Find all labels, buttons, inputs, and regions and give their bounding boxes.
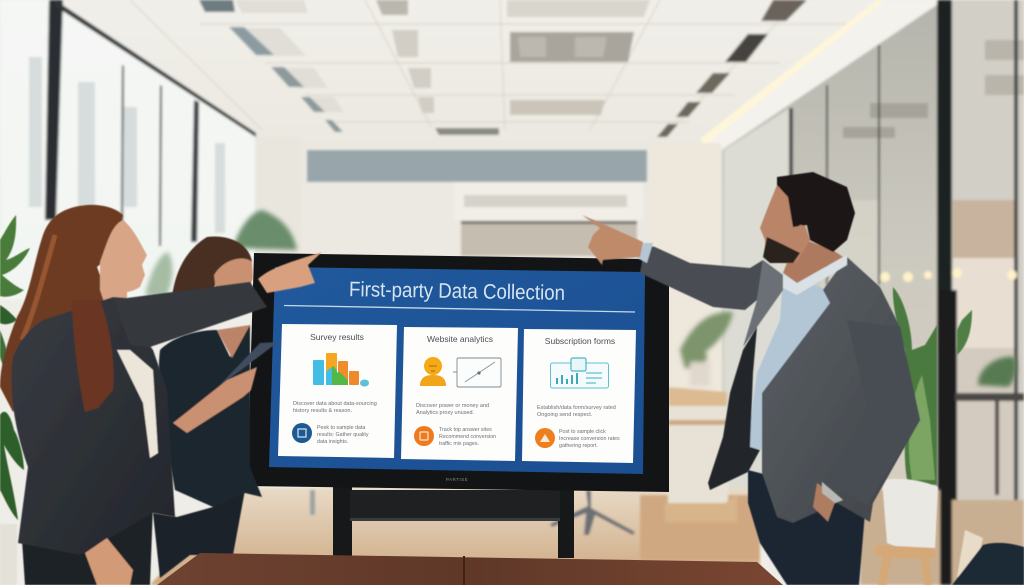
legs: [153, 490, 245, 578]
bezel: [247, 253, 669, 492]
description: Ongoing send respect.: [537, 412, 593, 418]
heading: Website analytics: [427, 334, 493, 344]
note: Recommend conversion: [439, 434, 496, 440]
description: Discover data about data-sourcing: [293, 401, 377, 407]
ear: [796, 225, 806, 241]
description: Analytics proxy unused.: [416, 410, 475, 416]
note: Peek to sample data: [317, 425, 365, 431]
window wall left: [0, 0, 256, 300]
title: First-party Data Collection: [349, 278, 565, 305]
ceiling light strip: [700, 0, 885, 145]
stool: [875, 545, 935, 585]
beard: [763, 237, 800, 263]
raised arm: [640, 245, 763, 310]
brand label: PARTISE: [446, 477, 468, 482]
icon: form dashboard: [550, 358, 608, 388]
icon: square badge: [414, 426, 434, 446]
hand pointing: [258, 252, 322, 293]
shelf cabinet: [665, 387, 737, 522]
long auburn hair: [0, 205, 123, 413]
forearm and hand: [173, 367, 257, 433]
background plants: [145, 210, 1016, 387]
card: subscription forms: [522, 329, 636, 463]
face: [214, 258, 253, 312]
shirt: [747, 275, 832, 450]
icon: book badge: [292, 423, 312, 443]
hand in pocket: [813, 483, 837, 522]
display screen: [247, 253, 669, 492]
small plant at back: [680, 312, 733, 386]
hair: [777, 172, 855, 252]
woman presenter left: [0, 205, 322, 585]
office chair behind: [550, 490, 635, 535]
cuff: [637, 243, 653, 263]
note: data insights.: [317, 439, 348, 445]
plant left with pot: [0, 215, 30, 585]
lower arm sleeve: [823, 320, 920, 505]
pointing hand: [582, 215, 643, 265]
collar: [783, 255, 847, 295]
plant pot: [882, 479, 938, 550]
trousers: [22, 505, 153, 585]
screen stand: [333, 486, 574, 558]
plant right with pot and stool: [875, 287, 1024, 585]
watch: [822, 482, 843, 503]
note: gathering report.: [559, 443, 598, 449]
soffit beam: [705, 0, 944, 150]
ceiling: [0, 0, 1024, 152]
note: traffic mix pages.: [439, 441, 479, 447]
lower hand: [85, 538, 133, 585]
face: [760, 185, 810, 262]
face and neck: [100, 220, 147, 338]
chest skin: [217, 325, 250, 358]
conference table: [157, 553, 783, 585]
woman behind: [153, 237, 278, 578]
description: Establish/data form/survey rated: [537, 405, 616, 411]
plant corner right: [978, 357, 1016, 387]
long hair: [170, 237, 252, 330]
dark chair: [952, 543, 1024, 585]
icon: triangle badge: [535, 428, 555, 448]
faint plant: [145, 252, 172, 300]
note: Track top answer sites: [439, 427, 492, 433]
outstretched arm: [113, 282, 267, 347]
icon: bar chart: [313, 353, 369, 386]
tablet: [220, 342, 278, 385]
blazer body: [762, 257, 920, 523]
inner dark lapel: [708, 327, 760, 490]
icon: user: [420, 357, 446, 386]
heading: Subscription forms: [545, 336, 615, 346]
note: Increase conversion rates: [559, 436, 620, 442]
hair over shoulder: [72, 300, 114, 412]
wooden floor: [150, 488, 760, 585]
plant behind woman: [233, 210, 297, 250]
blue panel: [269, 267, 645, 474]
description: history results & reason.: [293, 408, 352, 414]
divider: [284, 306, 635, 312]
man presenter right: [582, 172, 920, 523]
white top: [117, 350, 158, 458]
note: Post to sample click: [559, 429, 606, 435]
heading: Survey results: [310, 332, 364, 342]
card: survey results: [278, 324, 397, 458]
blazer body: [11, 297, 175, 555]
description: Discover power or money and: [416, 403, 489, 409]
card: website analytics: [401, 327, 518, 461]
note: results: Gather quality: [317, 432, 369, 438]
glass wall right: [722, 0, 1024, 585]
icon: line chart panel: [453, 358, 501, 387]
back wall: [255, 137, 721, 493]
neck: [783, 237, 843, 283]
man trousers: [748, 470, 866, 585]
blazer: [159, 325, 262, 507]
left lapel: [743, 260, 783, 347]
